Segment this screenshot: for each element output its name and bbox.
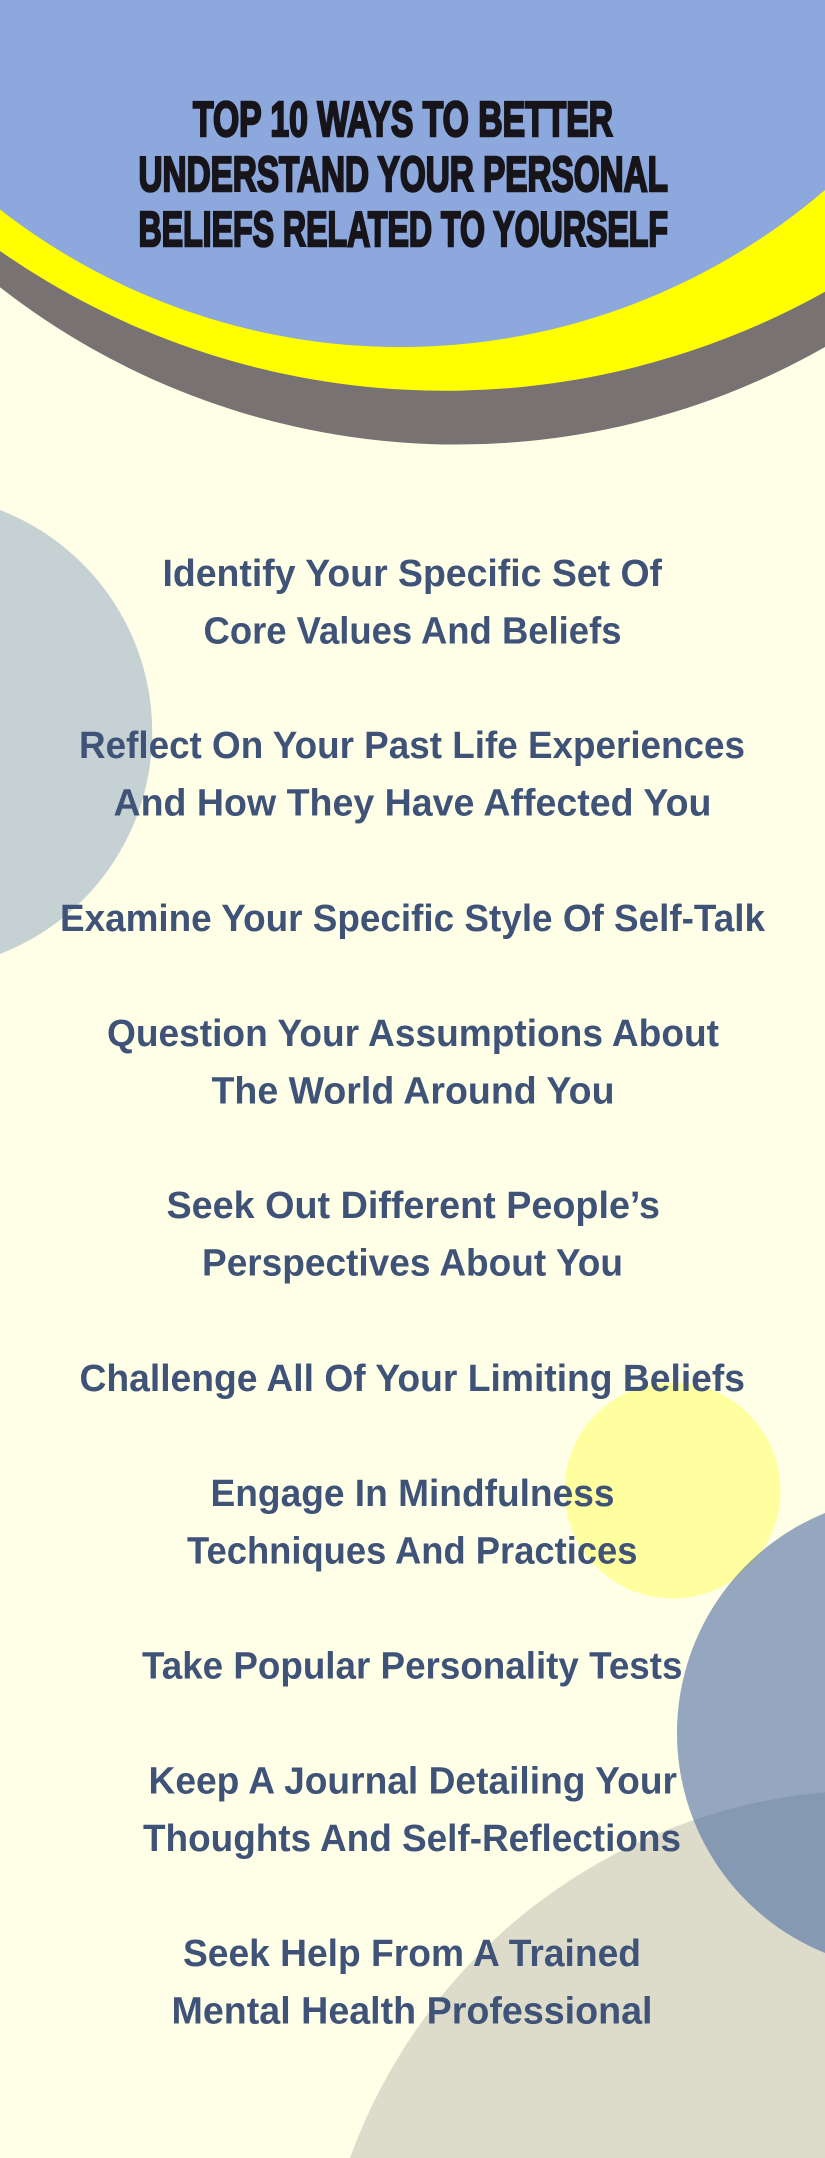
decorative circle: yellow: [564, 1382, 780, 1598]
decorative circle: right blue: [677, 1513, 825, 1953]
decorative circle: left gray-blue: [0, 510, 152, 954]
title: [138, 93, 668, 257]
way 7: Engage In Mindfulness: [210, 1473, 614, 1515]
way 2: And How They Have Affected You: [114, 782, 712, 824]
list of ten ways: [60, 553, 766, 2032]
way 8: Take Popular Personality Tests: [142, 1646, 682, 1688]
way 2: Reflect On Your Past Life Experiences: [79, 725, 745, 767]
way 1: Identify Your Specific Set Of: [162, 553, 662, 595]
way 9: Keep A Journal Detailing Your: [148, 1760, 677, 1802]
title: TOP 10 WAYS TO BETTER: [193, 93, 613, 147]
way 4: [107, 1013, 719, 1112]
decorative circle: beige: [350, 1792, 825, 2158]
way 3: Examine Your Specific Style Of Self-Talk: [60, 898, 766, 940]
way 10: Mental Health Professional: [172, 1990, 652, 2032]
way 1: [162, 553, 662, 652]
way 7: [187, 1473, 638, 1572]
way 4: The World Around You: [212, 1070, 614, 1112]
way 5: Seek Out Different People’s: [166, 1185, 660, 1227]
way 9: Thoughts And Self-Reflections: [143, 1818, 681, 1860]
way 10: [172, 1933, 652, 2032]
header: layered arcs: [0, 0, 825, 445]
way 7: Techniques And Practices: [187, 1530, 638, 1572]
way 6: Challenge All Of Your Limiting Beliefs: [80, 1358, 745, 1400]
gray arc: [0, 0, 825, 445]
way 9: [143, 1760, 681, 1860]
way 10: Seek Help From A Trained: [183, 1933, 641, 1975]
way 1: Core Values And Beliefs: [204, 610, 622, 652]
blue arc: [0, 0, 825, 347]
yellow arc: [0, 0, 825, 391]
way 2: [79, 725, 745, 824]
way 5: [166, 1185, 660, 1284]
way 4: Question Your Assumptions About: [107, 1013, 719, 1055]
way 5: Perspectives About You: [202, 1242, 623, 1284]
